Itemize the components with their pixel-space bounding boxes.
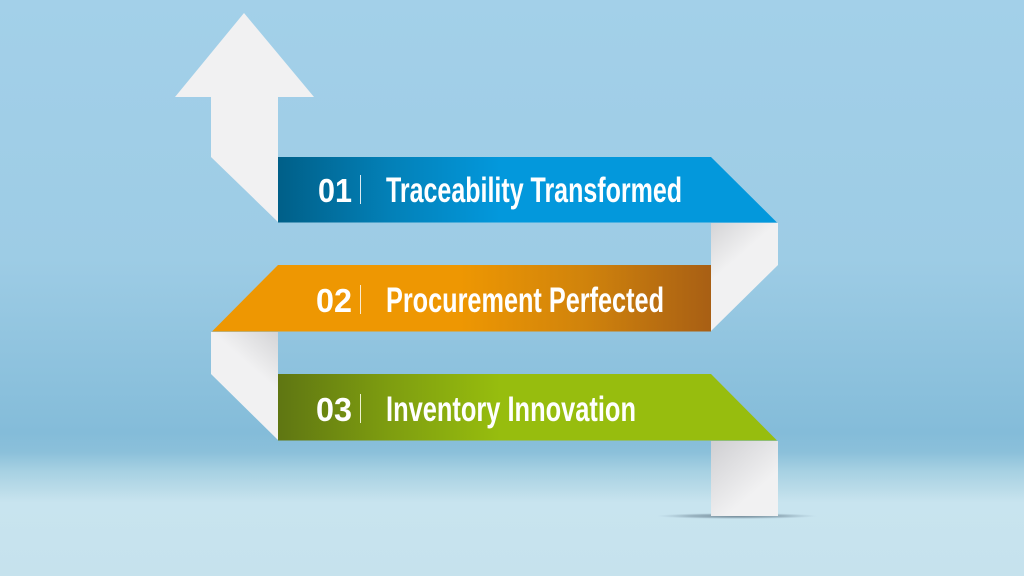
arrow head and shaft (175, 13, 314, 222)
number 02: 02 (316, 282, 352, 319)
bottom fold (711, 441, 778, 516)
text: Traceability Transformed: Traceability Transformed (386, 171, 682, 210)
text: Inventory Innovation: Inventory Innovation (386, 390, 636, 429)
right fold (711, 223, 778, 331)
ribbon 03 (278, 374, 777, 440)
number 01: 01 (318, 172, 352, 209)
text: Procurement Perfected: Procurement Perfected (386, 281, 664, 320)
ribbon 01 (278, 157, 777, 222)
ribbon 02 (212, 265, 711, 332)
left fold (211, 332, 278, 440)
floor shadow (657, 513, 817, 519)
number 03: 03 (316, 391, 352, 428)
